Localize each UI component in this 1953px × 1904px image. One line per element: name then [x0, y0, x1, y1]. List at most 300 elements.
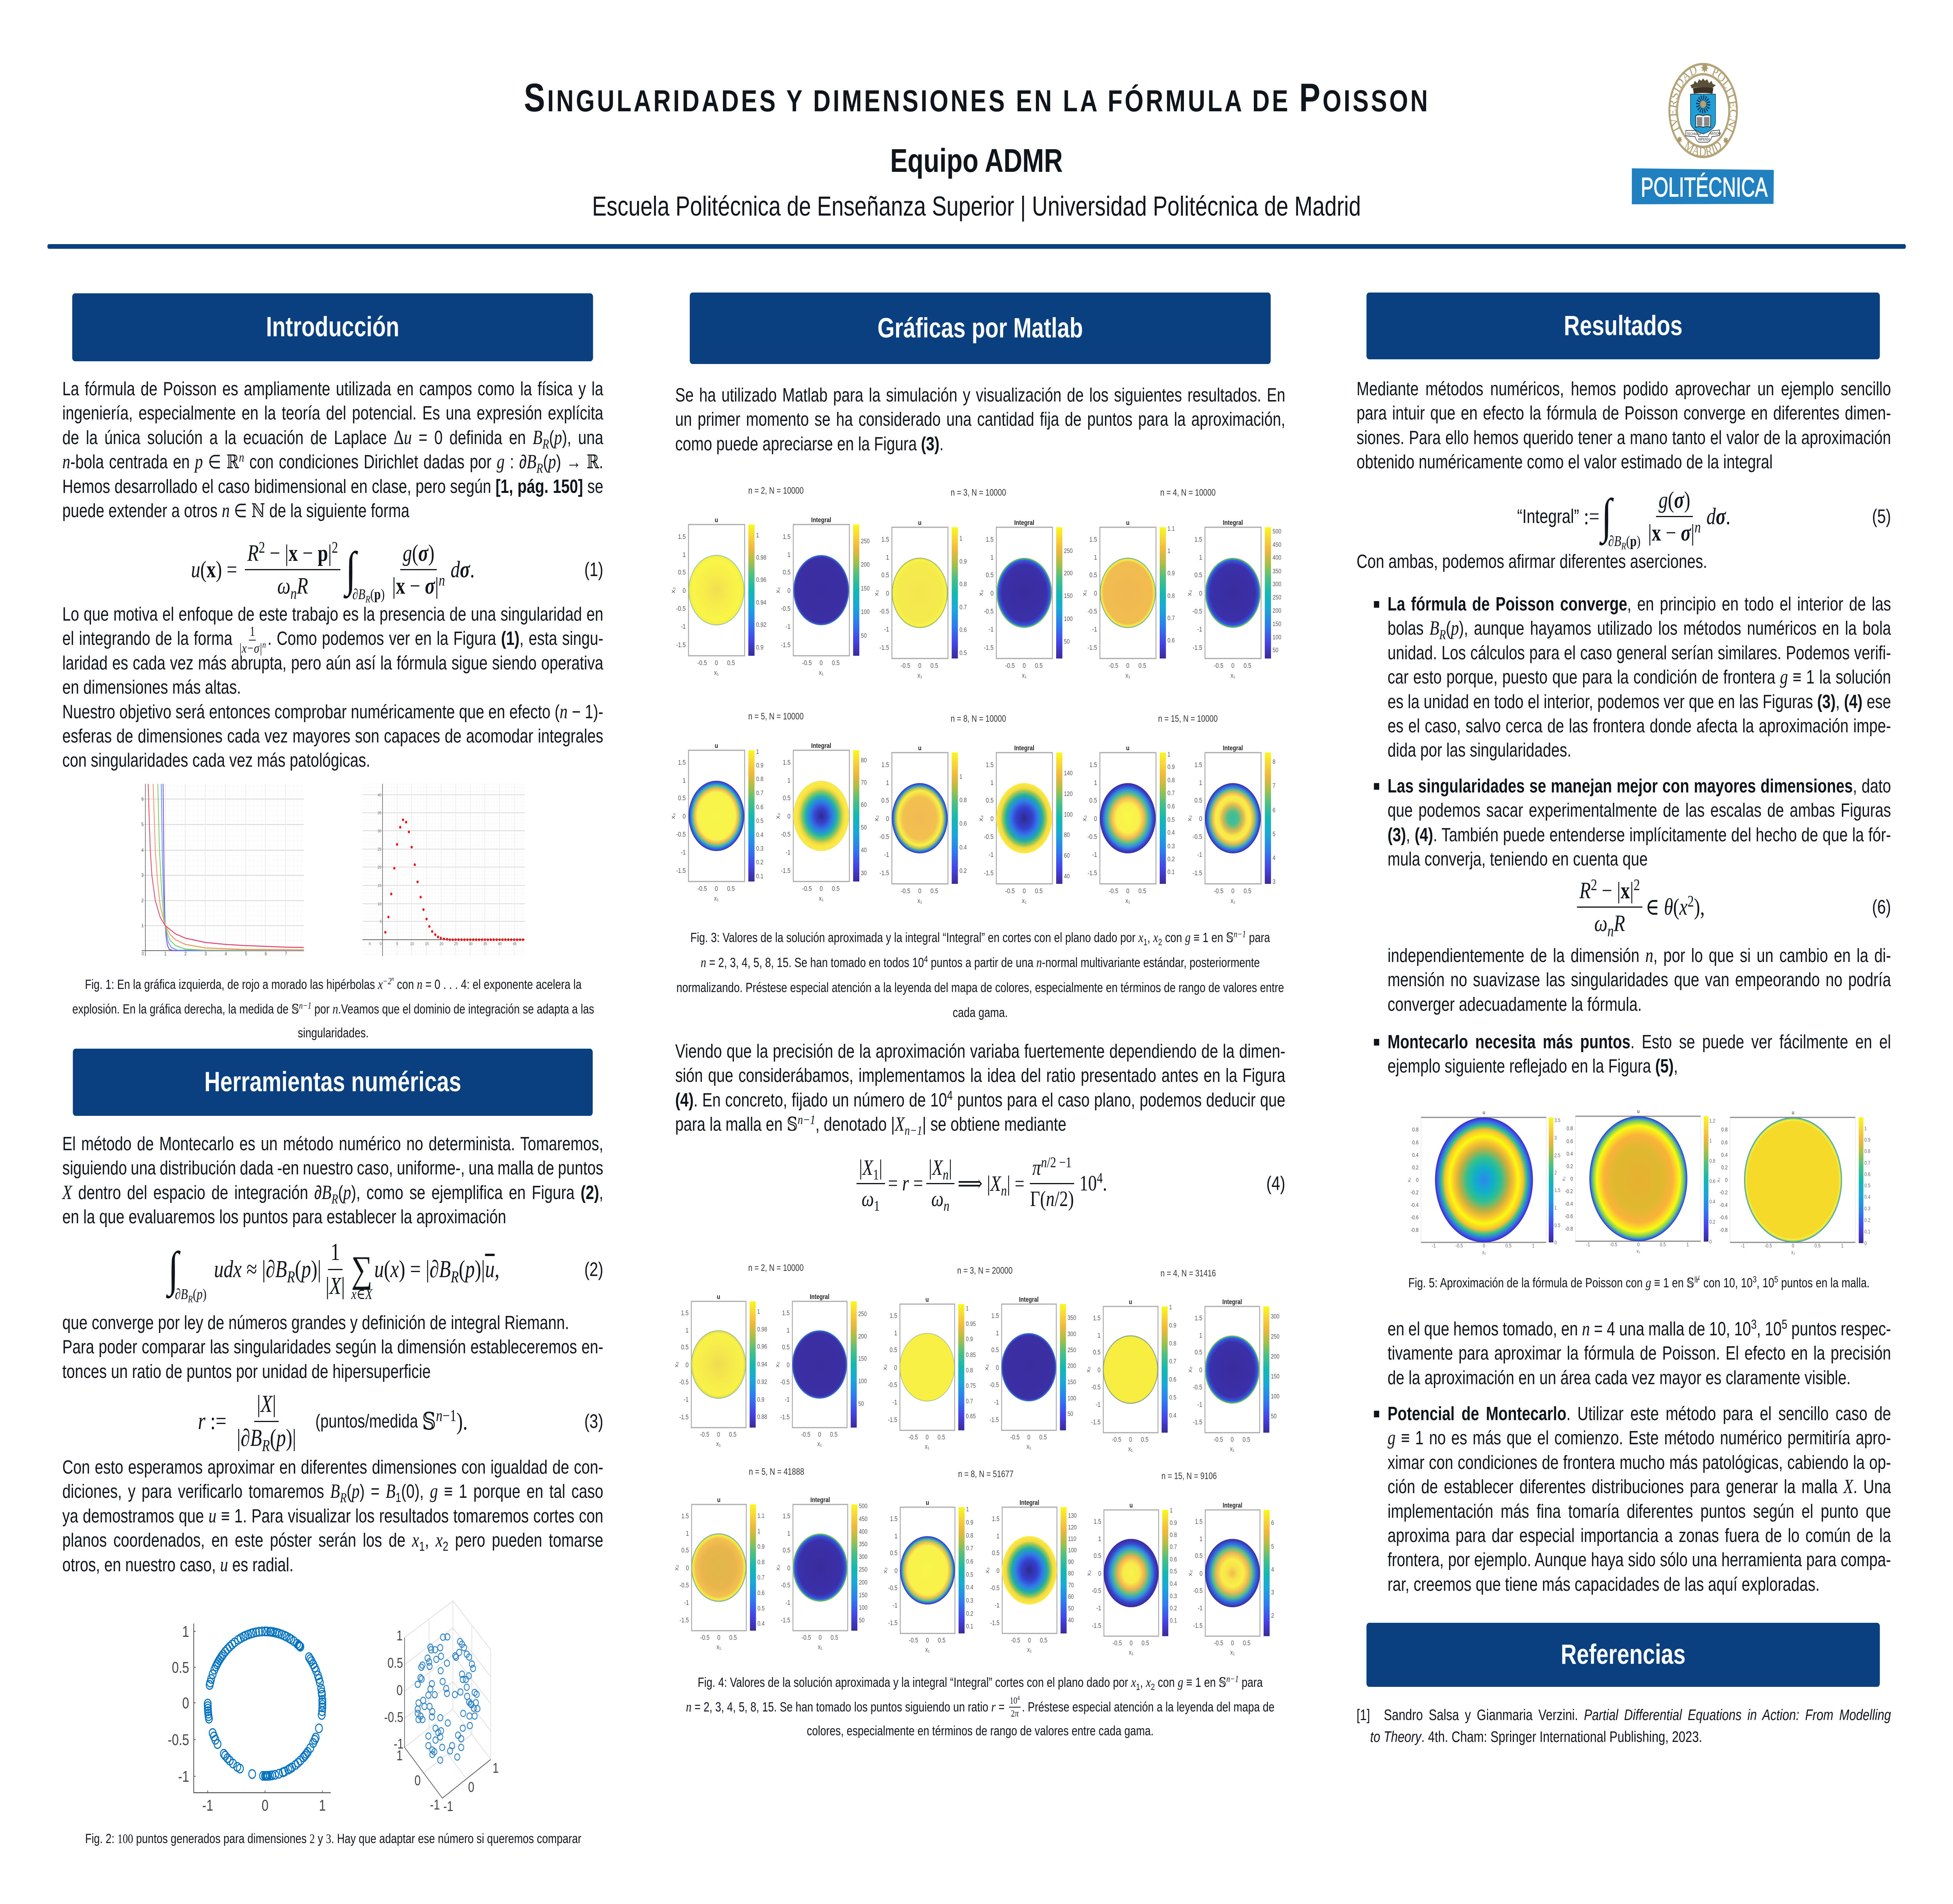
figure 5: panel 100000 points: 0.6: [1864, 1171, 1870, 1177]
figure 4: n=5, N=41888: 300: [859, 1554, 868, 1561]
figure 5: panel 10 points: 3.5: [1554, 1117, 1560, 1123]
text: convergence and ratio: Para poder comparar las singularidades según la dimensión estableceremos en-: [62, 1337, 603, 1358]
figure 3: n=5, N=10000: 0.5: [756, 817, 763, 824]
figure 3: n=2, N=10000: 100: [861, 608, 869, 616]
figure 4: n=15, N=9106: 0.5: [1170, 1568, 1177, 1575]
equation 3: |X|: [257, 1391, 276, 1417]
heading: Referencias: Referencias: [1561, 1639, 1685, 1670]
equation 4: 104.: [1080, 1170, 1107, 1196]
figure 3: n=5, N=10000: 0.8: [756, 776, 763, 783]
equation 1: u: [191, 556, 200, 582]
equation 1: |x − σ|n: [392, 571, 445, 598]
figure 3: n=5, N=10000: 0.3: [756, 845, 763, 852]
figure 4: n=5, N=41888: 0.7: [757, 1574, 765, 1581]
figure 3: n=4, N=10000: 1.1: [1168, 525, 1175, 532]
figure 3: n=15, N=10000: 0.2: [1168, 856, 1175, 863]
figure 1 left: hyperbolas: 0: [142, 951, 144, 956]
figure 3: n=4, N=10000: 100: [1273, 634, 1281, 641]
text: dimension independence: mensión no suavizase las singularidades que van empeorando no podría: [1387, 969, 1891, 990]
figure 2 left: points on circle: -1: [202, 1796, 213, 1814]
equation 4: [675, 1144, 1285, 1222]
figure 4: n=2, N=10000: Integral: [810, 1294, 829, 1301]
figure 4: n=2, N=10000: 0.9: [757, 1397, 764, 1403]
figure 3: n=8, N=10000: [873, 713, 1073, 905]
figure 4: n=8, N=51677: 0.6: [966, 1558, 973, 1565]
figure 2 right: 3D scatter: 0: [468, 1779, 474, 1795]
figure 3: n=15, N=10000: 0.5: [1168, 816, 1175, 823]
figure 3: n=2, N=10000: 0.94: [756, 599, 766, 606]
figure 4: n=3, N=20000: 0.8: [966, 1367, 973, 1374]
figure 3: n=2, N=10000: 250: [861, 538, 869, 545]
figure 1 left: hyperbolas: 3: [141, 873, 144, 878]
figure 3: n=4, N=10000: 400: [1273, 554, 1281, 561]
heading: Gráficas por Matlab: [690, 293, 1271, 364]
equation 2: ∫: [168, 1242, 179, 1296]
figure 4: n=4, N=31416: 250: [1271, 1334, 1280, 1340]
text: ratio paragraph: sión que considerábamos, implementamos la idea del ratio presentado antes en la Figura: [675, 1065, 1285, 1086]
figure 3: n=3, N=10000: 0.7: [959, 604, 967, 611]
figure 1 left: hyperbolas: 2: [141, 898, 144, 903]
heading: Resultados: Resultados: [1564, 310, 1682, 341]
school and university: Escuela Politécnica de Enseñanza Superior | Universidad Politécnica de Madrid: [592, 191, 1361, 221]
figure 4: n=3, N=20000: 0.65: [966, 1413, 976, 1420]
text: results intro: obtenido numéricamente como el valor estimado de la integral: [1357, 451, 1773, 473]
equation 3: r :=: [198, 1408, 227, 1434]
figure 4: n=3, N=20000: 0.85: [966, 1352, 976, 1359]
figure 1 left: hyperbolas: 4: [225, 951, 227, 956]
figure 3: n=3, N=10000: n = 3, N = 10000: [951, 487, 1006, 498]
equation 4: ⟹ |Xn| =: [958, 1172, 1025, 1199]
figure 3: n=5, N=10000: 0.9: [756, 762, 763, 769]
figure 3: n=8, N=10000: 60: [1064, 852, 1070, 859]
text: motivation paragraph: laridad es cada vez más abrupta, pero aún así la fórmula sigue siendo operativa: [62, 653, 603, 674]
figure 4: n=15, N=9106: 0.1: [1170, 1617, 1177, 1624]
equation 1: (1): [584, 559, 603, 580]
bullet: Monte Carlo potential: ción de establecer diferentes distribuciones para generar la malla X. Una: [1387, 1476, 1891, 1498]
figure 3: n=4, N=10000: 200: [1273, 607, 1281, 614]
figure 2 right: 3D scatter: 0: [396, 1683, 403, 1698]
text: results intro: [1357, 377, 1891, 475]
figure 5: panel 1000 points: 0.8: [1709, 1158, 1716, 1164]
figure 4: n=8, N=51677: 0.1: [966, 1624, 973, 1630]
figure 1 right: sphere measure: 10: [410, 942, 414, 946]
equation 1: R2 − |x − p|2: [247, 538, 338, 566]
figure 3: n=4, N=10000: 0.8: [1168, 592, 1175, 600]
references: [1357, 1704, 1891, 1748]
equation 5: dσ.: [1707, 503, 1730, 529]
figure 2 left: points on circle: 1: [182, 1622, 189, 1640]
figure 3: n=4, N=10000: 1: [1168, 548, 1170, 555]
figure 5: panel 1000 points: u: [1637, 1108, 1640, 1114]
figure 5: panel 100000 points: u: [1792, 1110, 1794, 1115]
figure 3: n=8, N=10000: 80: [1064, 832, 1070, 839]
figure 3: n=8, N=10000: u: [918, 744, 921, 752]
figure 4: n=4, N=31416: [1085, 1268, 1280, 1453]
equation 6: [1387, 868, 1891, 946]
bullet: singularities handled better: mula converja, teniendo en cuenta que: [1387, 849, 1648, 870]
figure 5: panel 100000 points: 0: [1864, 1240, 1867, 1246]
figure 3: n=15, N=10000: Integral: [1223, 744, 1243, 752]
text: motivation paragraph: en dimensiones más altas.: [62, 677, 241, 698]
caption: figure 3: Fig. 3: Valores de la solución aproximada y la integral “Integral” en cortes con el plano dado por x1, x2 con g ≡ 1 en 𝕊n−1 para: [691, 930, 1270, 947]
figure 5: panel 1000 points: 1.2: [1709, 1118, 1716, 1124]
figure 4: n=3, N=20000: 0.75: [966, 1383, 976, 1390]
figure 3: n=4, N=10000: 0.6: [1168, 637, 1175, 644]
equation 6: R2 − |x|2: [1580, 876, 1640, 903]
figure 5: panel 100000 points: 0.7: [1864, 1160, 1870, 1166]
text: comparison setup: diciones, y para verificarlo tomaremos BR(p) = B1(0), g ≡ 1 porque en tal caso: [62, 1480, 603, 1506]
figure 4: n=15, N=9106: 0.9: [1170, 1520, 1177, 1527]
figure 4: n=4, N=31416: 0.8: [1169, 1340, 1176, 1347]
figure 3: n=4, N=10000: 350: [1273, 568, 1281, 575]
figure 3: n=8, N=10000: 0.8: [959, 797, 967, 804]
figure 4: n=4, N=31416: 0.4: [1169, 1413, 1176, 1419]
figure 4: n=15, N=9106: 0.2: [1170, 1605, 1177, 1612]
figure 5: panel 1000 points: 0.6: [1709, 1178, 1716, 1184]
text: results intro: siones. Para ello hemos querido tener a mano tanto el valor de la aproximación: [1357, 427, 1891, 448]
bullet: Poisson converges: es el caso, salvo cerca de las frontera donde afecta la aproximación impe-: [1387, 716, 1891, 737]
figure 5: panel 1000 points: 0.2: [1709, 1219, 1716, 1225]
figure 3: n=4, N=10000: Integral: [1223, 519, 1243, 526]
figure 4: n=4, N=31416: 50: [1271, 1413, 1276, 1420]
equation 2: 1: [330, 1239, 340, 1265]
header rule: [47, 244, 1906, 249]
figure 4: n=8, N=51677: 80: [1068, 1570, 1074, 1577]
figure 4: n=8, N=51677: 0.7: [966, 1545, 973, 1552]
figure 5: panel 100000 points: 0.2: [1864, 1217, 1870, 1223]
text: motivation paragraph: el integrando de la forma . Como podemos ver en la Figura (1), esta singu-: [62, 628, 603, 649]
heading: Gráficas por Matlab: Gráficas por Matlab: [877, 313, 1083, 344]
bullet: Poisson converges: bolas BR(p), aunque hayamos utilizado los métodos numéricos en la bola: [1387, 617, 1891, 642]
figure 5: panel 10 points: 0: [1554, 1240, 1557, 1246]
figure 2 right: 3D scatter: 0.5: [387, 1655, 403, 1671]
figure 4: n=2, N=10000: u: [717, 1294, 720, 1301]
figure 1 right: sphere measure: 40: [378, 793, 382, 798]
text: comparison setup: Con esto esperamos aproximar en diferentes dimensiones con igualdad de con-: [62, 1457, 603, 1478]
text: intro paragraph: de la única solución a la ecuación de Laplace Δu = 0 definida en BR(p), una: [62, 426, 603, 451]
figure 5: panel 1000 points: 0: [1709, 1239, 1712, 1245]
figure 5: panel 100000 points: 0.3: [1864, 1206, 1870, 1212]
caption: figure 4: 104: [1010, 1694, 1020, 1706]
figure 3: n=15, N=10000: 0.4: [1168, 829, 1175, 836]
equation 6: (6): [1872, 896, 1891, 918]
text: Monte Carlo method: El método de Montecarlo es un método numérico no determinista. Tomaremos,: [62, 1133, 603, 1155]
figure 1 right: sphere measure: 15: [378, 883, 382, 888]
figure 4: n=8, N=51677: 110: [1068, 1536, 1076, 1543]
figure 3: n=3, N=10000: [873, 487, 1073, 679]
figure 4: n=8, N=51677: u: [926, 1499, 929, 1507]
figure 3: n=3, N=10000: 150: [1064, 592, 1073, 600]
figure 4: n=4, N=31416: 0.9: [1169, 1322, 1176, 1329]
bullet: Monte Carlo needs more points: ejemplo siguiente reflejado en la Figura (5),: [1387, 1056, 1678, 1077]
bullet: Poisson converges: [1387, 592, 1891, 763]
figure 1 left: hyperbolas: 5: [141, 822, 144, 827]
figure 5: panel 10 points: 1.5: [1554, 1187, 1560, 1193]
figure 4: n=15, N=9106: u: [1130, 1502, 1133, 1510]
figure 3: n=4, N=10000: n = 4, N = 10000: [1160, 487, 1216, 498]
equation 5: g(σ): [1658, 487, 1690, 512]
text: intro paragraph: [62, 377, 603, 523]
figure 4: n=8, N=51677: [882, 1469, 1076, 1654]
figure 3: n=2, N=10000: [670, 485, 869, 676]
figure 1 left: hyperbolas: 5: [245, 951, 247, 956]
figure 4: n=4, N=31416: 0.7: [1169, 1358, 1176, 1365]
equation 5: “Integral”: [1517, 505, 1579, 527]
text: intro paragraph: ingeniería, especialmente en la teoría del potencial. Es una expresión explícita: [62, 403, 603, 424]
figure 1 right: sphere measure: 0: [380, 942, 382, 946]
text: motivation paragraph: [62, 602, 603, 773]
figure 4: n=4, N=31416: 100: [1271, 1393, 1280, 1400]
figure 1 left: hyperbolas: 1: [164, 951, 166, 956]
figure 2 right: 3D scatter: -1: [430, 1797, 440, 1813]
figure 4: n=5, N=41888: 0.6: [757, 1590, 765, 1597]
figure 4: n=2, N=10000: 0.94: [757, 1361, 767, 1368]
equation 2: u: [485, 1256, 494, 1283]
figure 3: n=2, N=10000: n = 2, N = 10000: [748, 485, 803, 496]
figure 4: n=8, N=51677: 0.9: [966, 1519, 973, 1526]
text: Matlab intro: Se ha utilizado Matlab para la simulación y visualización de los siguientes resultados. En: [675, 385, 1285, 406]
bullet: Poisson converges: car esto porque, puesto que para la condición de frontera g ≡ 1 la solución: [1387, 666, 1891, 688]
figure 4: n=3, N=20000: Integral: [1019, 1296, 1039, 1304]
figure 3: n=15, N=10000: u: [1126, 744, 1130, 752]
figure 1 right: sphere measure: 25: [378, 847, 382, 852]
figure 3: n=3, N=10000: 50: [1064, 638, 1070, 645]
figure 4: n=3, N=20000: [882, 1265, 1076, 1451]
figure 3: n=8, N=10000: Integral: [1014, 744, 1034, 752]
figure 1 right: sphere measure: 30: [469, 942, 473, 946]
figure 1 left: hyperbolas: 7: [285, 951, 287, 956]
figure 3: n=5, N=10000: 30: [861, 870, 867, 877]
figure 3: n=3, N=10000: 1: [959, 535, 962, 542]
figure 4: n=2, N=10000: 150: [858, 1356, 867, 1362]
figure 4: n=15, N=9106: 0.4: [1170, 1581, 1177, 1588]
caption: figure 4: Fig. 4: Valores de la solución aproximada y la integral “Integral” cortes con el plano dado por x1, x2 con g ≡ 1 en 𝕊n−1 para: [698, 1674, 1263, 1692]
equation 1: ∫: [345, 542, 356, 596]
figure 4: n=5, N=41888: Integral: [810, 1497, 830, 1504]
equation 2: ,: [494, 1256, 500, 1283]
figure 4: n=5, N=41888: 400: [859, 1529, 868, 1535]
figure 4: n=3, N=20000: 0.9: [966, 1336, 973, 1343]
figure 5: panel 100000 points: 0.9: [1864, 1137, 1870, 1143]
figure 4: n=5, N=41888: n = 5, N = 41888: [749, 1466, 804, 1477]
figure 1 right: sphere measure: -5: [368, 942, 371, 946]
text: Matlab intro: como puede apreciarse en la Figura (3).: [675, 434, 944, 455]
figure 1 right: sphere measure: 40: [498, 942, 502, 946]
caption: figure 4: colores, especialmente en términos de rango de valores entre cada gama.: [807, 1724, 1154, 1738]
bullet: Monte Carlo potential: aproxima para dar especial importancia a zonas fuera de lo común de la: [1387, 1525, 1891, 1546]
figure 4: n=15, N=9106: [1086, 1470, 1274, 1656]
figure 3: n=4, N=10000: 500: [1273, 528, 1281, 535]
text: dimension independence: independientemente de la dimensión n, por lo que si un cambio en la di-: [1387, 944, 1891, 967]
figure 4: n=5, N=41888: 0.4: [757, 1621, 765, 1627]
figure 1 left: hyperbolas: 4: [141, 848, 144, 853]
text: ratio paragraph: para la malla en 𝕊n−1, denotado |Xn−1| se obtiene mediante: [675, 1113, 1066, 1138]
figure 2 right: 3D scatter: [384, 1601, 499, 1814]
figure 3: n=2, N=10000: 0.9: [756, 644, 763, 651]
figure 2 left: points on circle: [168, 1622, 331, 1814]
figure 4: n=8, N=51677: 0.8: [966, 1533, 973, 1539]
figure 4: n=4, N=31416: 300: [1271, 1313, 1280, 1320]
equation 4: |Xn|: [928, 1156, 952, 1183]
figure 3: n=8, N=10000: 40: [1064, 873, 1070, 880]
figure 3: n=5, N=10000: 80: [861, 757, 867, 764]
figure 3: n=3, N=10000: u: [918, 519, 921, 526]
figure 4: n=8, N=51677: Integral: [1019, 1499, 1039, 1507]
bullet: Monte Carlo potential: [1387, 1402, 1891, 1597]
figure 1 left: hyperbolas: 1: [141, 923, 144, 928]
figure 4: n=8, N=51677: 100: [1068, 1547, 1076, 1554]
text: motivation paragraph: esferas de dimensiones cada vez mayores son capaces de acomodar integrales: [62, 726, 603, 747]
equation 1: x: [207, 556, 216, 582]
caption: figure 5: Fig. 5: Aproximación de la fórmula de Poisson con g ≡ 1 en 𝕊⊮ con 10, 103, 105 puntos en la malla.: [1409, 1274, 1870, 1291]
figure 3: n=5, N=10000: 70: [861, 779, 867, 786]
figure 2 right: 3D scatter: 1: [493, 1760, 499, 1776]
figure 3: n=15, N=10000: 3: [1273, 878, 1275, 885]
figure 3: n=3, N=10000: 0.5: [959, 650, 967, 657]
text: motivation paragraph: Lo que motiva el enfoque de este trabajo es la presencia de una singularidad en: [62, 604, 603, 625]
figure 3: n=2, N=10000: 150: [861, 585, 869, 592]
figure 4: n=15, N=9106: 6: [1271, 1520, 1274, 1527]
figure 3: n=5, N=10000: [670, 711, 867, 902]
figure 4: n=15, N=9106: 0.3: [1170, 1593, 1177, 1600]
text: dimension independence: converger adecuadamente la fórmula.: [1387, 994, 1642, 1015]
figure 3: n=3, N=10000: 250: [1064, 548, 1073, 555]
figure 4: n=5, N=41888: 200: [859, 1579, 868, 1586]
equation 4: (4): [1266, 1172, 1285, 1194]
figure 2 left: points on circle: 0: [262, 1796, 268, 1814]
bullet: singularities handled better: que podemos sacar experimentalmente de las escalas de ambas Figuras: [1387, 800, 1891, 821]
figure 3: n=2, N=10000: 0.98: [756, 554, 766, 561]
text: figure 5 comment: en el que hemos tomado, en n = 4 una malla de 10, 103, 105 puntos respec-: [1387, 1317, 1891, 1340]
figure 5: panel 100000 points: 1: [1864, 1126, 1867, 1131]
heading: Herramientas numéricas: Herramientas numéricas: [204, 1067, 461, 1097]
figure 4: n=5, N=41888: 450: [859, 1516, 868, 1523]
figure 4: n=15, N=9106: n = 15, N = 9106: [1162, 1470, 1217, 1481]
figure 3: n=2, N=10000: 1: [756, 532, 759, 539]
text: convergence and ratio: que converge por ley de números grandes y definición de integral Riemann.: [62, 1312, 569, 1333]
figure 4: n=8, N=51677: 1: [966, 1506, 969, 1513]
logo: university seal: TECHNICA: [1687, 132, 1701, 136]
equation 6: ωnR: [1594, 910, 1625, 940]
figure 1 right: sphere measure: 15: [425, 942, 429, 946]
figure 4: n=8, N=51677: 0.3: [966, 1597, 973, 1604]
figure 3: n=3, N=10000: Integral: [1014, 519, 1034, 526]
equation 4: Γ(n/2): [1030, 1187, 1074, 1211]
figure 4: n=15, N=9106: 2: [1271, 1613, 1274, 1620]
figure 4: n=15, N=9106: 5: [1271, 1544, 1274, 1550]
figure 4: n=5, N=41888: 250: [859, 1567, 868, 1574]
bullet: singularities handled better: (3), (4). También puede entenderse implícitamente del hecho de que la fór-: [1387, 824, 1891, 846]
figure 4: n=8, N=51677: 60: [1068, 1594, 1074, 1601]
figure 3: n=8, N=10000: 120: [1064, 791, 1073, 798]
figure 4: n=8, N=51677: 0.5: [966, 1572, 973, 1578]
equation 2: ∂BR(p): [175, 1286, 207, 1305]
figure 3: n=2, N=10000: 50: [861, 632, 867, 639]
text: comparison setup: planos coordenados, en este póster serán los de x1, x2 pero pueden tomarse: [62, 1529, 603, 1554]
figure 4: n=8, N=51677: n = 8, N = 51677: [958, 1469, 1014, 1479]
figure 3: n=8, N=10000: 0.6: [959, 820, 967, 827]
figure 5: panel 10 points: u: [1483, 1110, 1485, 1115]
text: intro paragraph: n-bola centrada en p ∈ ℝn con condiciones Dirichlet dadas por g : ∂BR(p) → ℝ.: [62, 450, 603, 476]
caption: figure 3: n = 2, 3, 4, 5, 8, 15. Se han tomado en todos 104 puntos a partir de una n-normal multivariante estándar, posteriormente: [701, 954, 1260, 970]
figure 3: n=5, N=10000: 0.7: [756, 790, 763, 797]
bullet: Monte Carlo potential: g ≡ 1 no es más que el comienzo. Este método numérico permitiría apro-: [1387, 1427, 1891, 1449]
figure 3: n=8, N=10000: 100: [1064, 811, 1073, 818]
figure 3: n=5, N=10000: 0.4: [756, 832, 764, 839]
equation 5: |x − σ|n: [1648, 518, 1701, 545]
figure 5: panel 100000 points: 0.8: [1864, 1148, 1870, 1154]
text: comparison setup: [62, 1455, 603, 1577]
figure 4: n=3, N=20000: 100: [1068, 1395, 1076, 1402]
figure 4: n=4, N=31416: Integral: [1222, 1299, 1242, 1306]
figure 3: n=8, N=10000: n = 8, N = 10000: [951, 713, 1006, 724]
figure 3: n=2, N=10000: 0.96: [756, 576, 766, 584]
figure 1 left: hyperbolas: 6: [265, 951, 267, 956]
text: comparison setup: otros, en nuestro caso, u es radial.: [62, 1554, 293, 1576]
caption: figure 4: [675, 1670, 1285, 1743]
equation 2: |X|: [326, 1272, 345, 1299]
figure 3: n=4, N=10000: 0.9: [1168, 570, 1175, 577]
figure 3: n=15, N=10000: n = 15, N = 10000: [1158, 713, 1218, 724]
caption: figure 1: Fig. 1: En la gráfica izquierda, de rojo a morado las hipérbolas x−2n con n = 0 . . . 4: el exponente acelera la: [85, 976, 582, 992]
figure 4: n=8, N=51677: 0.2: [966, 1611, 973, 1617]
text: Matlab intro: [675, 383, 1285, 456]
logo: university seal: NATIONI: [1710, 132, 1721, 136]
figure 5: panel 100000 points: [1716, 1110, 1870, 1255]
figure 4: n=15, N=9106: 0.6: [1170, 1556, 1177, 1563]
figure 3: n=5, N=10000: 0.2: [756, 859, 763, 866]
bullet: Monte Carlo potential: ximar con condiciones de frontera mucho más patológicas, cabiendo la op-: [1387, 1452, 1891, 1473]
figure 4: n=3, N=20000: 0.7: [966, 1398, 973, 1405]
figure 4: n=2, N=10000: n = 2, N = 10000: [748, 1262, 803, 1273]
text: intro paragraph: La fórmula de Poisson es ampliamente utilizada en campos como la física y la: [62, 378, 603, 400]
caption: figure 3: normalizando. Préstese especial atención a la leyenda del mapa de colores, especialmente en términos de rango de valores entre: [677, 980, 1284, 995]
figure 1 left: hyperbolas: 2: [184, 951, 187, 956]
figure 3: n=3, N=10000: 200: [1064, 570, 1073, 577]
figure 3: n=5, N=10000: u: [715, 742, 718, 749]
figure 3: n=15, N=10000: 5: [1273, 831, 1275, 838]
figure 4: n=8, N=51677: 40: [1068, 1617, 1074, 1624]
figure 4: n=2, N=10000: 100: [858, 1378, 867, 1385]
caption: figure 4: 2π: [1011, 1708, 1019, 1719]
figure 4: n=5, N=41888: [674, 1466, 868, 1651]
figure 5: panel 100000 points: 0.5: [1864, 1183, 1870, 1188]
figure 5: panel 1000 points: 1: [1709, 1138, 1712, 1144]
equation 5: (5): [1872, 505, 1891, 527]
figure 4: n=4, N=31416: n = 4, N = 31416: [1160, 1268, 1216, 1279]
figure 4: n=5, N=41888: 500: [859, 1503, 868, 1510]
caption: figure 1: explosión. En la gráfica derecha, la medida de 𝕊n−1 por n.Veamos que el dominio de integración se adapta a las: [72, 1001, 594, 1017]
figure 4: n=3, N=20000: 300: [1068, 1331, 1076, 1338]
figure 4: n=3, N=20000: 250: [1068, 1347, 1076, 1354]
figure 2 left: points on circle: 0: [182, 1694, 189, 1712]
figure 3: n=15, N=10000: 7: [1273, 782, 1275, 789]
figure 4: n=5, N=41888: 0.5: [757, 1605, 765, 1612]
figure 3: n=5, N=10000: 1: [756, 748, 759, 755]
equation 1: g(σ): [403, 540, 434, 566]
text: intro paragraph: puede extender a otros n ∈ ℕ de la siguiente forma: [62, 500, 409, 522]
figure 4: n=2, N=10000: [673, 1262, 867, 1448]
figure 1 left: hyperbolas: 3: [205, 951, 207, 956]
figure 4: n=5, N=41888: 1.1: [757, 1513, 765, 1520]
figure 2 right: 3D scatter: -1: [443, 1799, 453, 1814]
figure 1 right: sphere measure: 20: [378, 865, 382, 870]
figure 4: n=15, N=9106: Integral: [1223, 1502, 1242, 1510]
bullet: Monte Carlo potential: Potencial de Montecarlo. Utilizar este método para el sencillo caso de: [1387, 1403, 1891, 1424]
text: Monte Carlo method: X dentro del espacio de integración ∂BR(p), como se ejemplifica en Figura (2),: [62, 1181, 603, 1206]
figure 1 left: hyperbolas: 6: [141, 796, 144, 802]
figure 2 left: points on circle: 0.5: [172, 1658, 189, 1676]
